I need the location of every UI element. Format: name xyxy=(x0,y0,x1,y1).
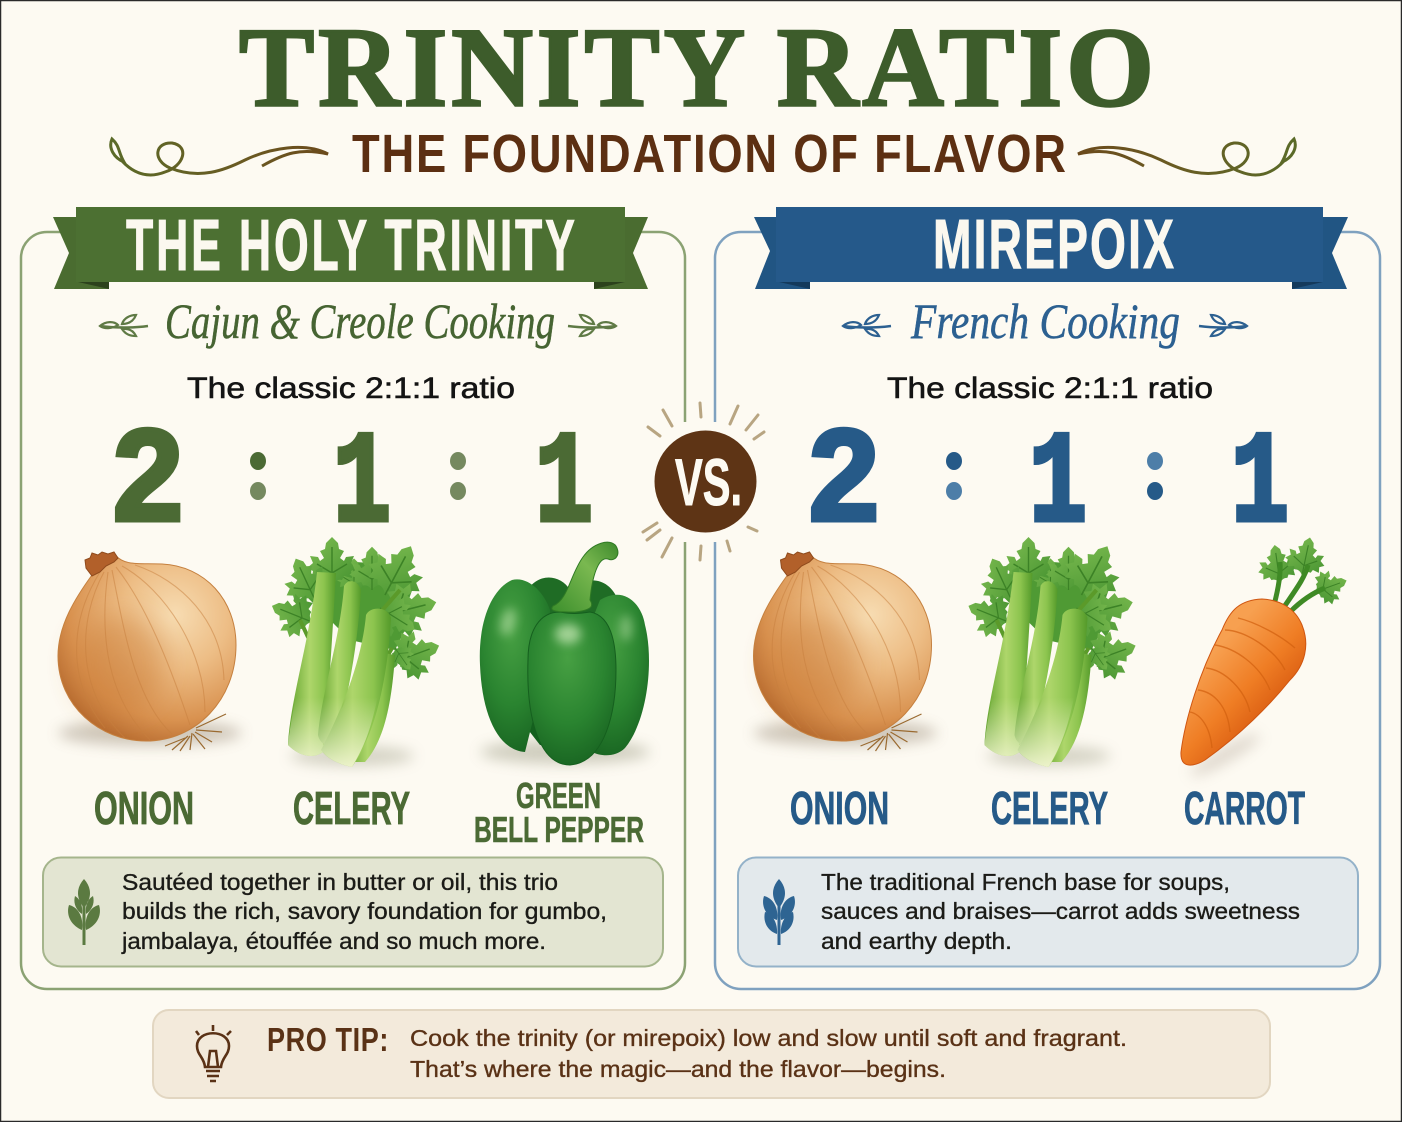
vs badge: VS. xyxy=(675,445,742,519)
ratio numbers: 1 xyxy=(1029,413,1087,560)
callout text: sauces and braises—carrot adds sweetness xyxy=(821,898,1300,924)
callout text xyxy=(821,869,1300,954)
title: TRINITY RATIO xyxy=(239,6,1154,130)
flourish: left xyxy=(111,139,328,175)
ratio caption: The classic 2:1:1 ratio xyxy=(187,372,515,405)
label: carrot: CARROT xyxy=(1184,782,1305,834)
icon: onion xyxy=(58,552,242,751)
sprig: right xyxy=(1199,315,1247,336)
icon: carrot xyxy=(1181,533,1353,781)
label: onion: ONION xyxy=(94,782,194,834)
callout text: and earthy depth. xyxy=(821,928,1012,954)
ratio numbers: 1 xyxy=(535,413,593,560)
ratio caption: The classic 2:1:1 ratio xyxy=(887,372,1213,405)
icon: light bulb xyxy=(196,1025,231,1081)
callout text: The traditional French base for soups, xyxy=(821,869,1230,895)
ratio numbers: 1 xyxy=(1231,413,1289,560)
region subtitle: french: French Cooking xyxy=(910,293,1180,349)
ratio numbers xyxy=(809,402,1289,560)
callout text: Sautéed together in butter or oil, this trio xyxy=(122,869,558,895)
ratio numbers: 2 xyxy=(113,402,183,548)
ribbon: holy trinity: THE HOLY TRINITY xyxy=(126,205,575,286)
callout: mirepoix xyxy=(738,858,1358,966)
pro tip bar xyxy=(153,1010,1270,1098)
panel: mirepoix xyxy=(715,204,1380,989)
ratio numbers: 2 xyxy=(809,402,879,548)
flourish: right xyxy=(1078,139,1295,175)
pro tip text: Cook the trinity (or mirepoix) low and slow until soft and fragrant. xyxy=(410,1025,1127,1051)
ribbon: mirepoix xyxy=(754,204,1348,289)
label: celery: CELERY xyxy=(293,782,410,834)
ratio numbers: 1 xyxy=(333,413,391,560)
pro tip text: That’s where the magic—and the flavor—begins. xyxy=(410,1056,946,1082)
callout text: jambalaya, étouffée and so much more. xyxy=(121,928,546,954)
icon: leaf sprig xyxy=(763,879,795,945)
sprig: right xyxy=(568,315,616,336)
sunburst rays xyxy=(643,403,764,560)
label: green bell pepper: GREEN xyxy=(516,775,601,816)
icon: onion xyxy=(754,552,938,751)
label: celery: CELERY xyxy=(991,782,1108,834)
icon: celery xyxy=(264,533,448,767)
callout: holy trinity xyxy=(43,858,663,966)
label: green bell pepper: BELL PEPPER xyxy=(474,809,644,850)
ribbon: mirepoix: MIREPOIX xyxy=(933,204,1174,283)
label: green bell pepper xyxy=(474,775,644,850)
sprig: left xyxy=(843,315,891,336)
ratio numbers xyxy=(113,402,593,560)
callout text xyxy=(121,869,607,954)
icon: leaf sprig xyxy=(68,879,100,945)
pro tip text xyxy=(410,1025,1127,1082)
panel: holy trinity xyxy=(21,205,685,989)
sprig: left xyxy=(100,315,148,336)
icon: green bell pepper xyxy=(480,542,650,765)
subtitle: THE FOUNDATION OF FLAVOR xyxy=(352,123,1066,184)
vs badge xyxy=(643,403,764,560)
callout text: builds the rich, savory foundation for gumbo, xyxy=(122,898,607,924)
pro tip label: PRO TIP: xyxy=(267,1023,388,1059)
icon: celery xyxy=(960,533,1144,767)
label: onion: ONION xyxy=(790,782,889,834)
region subtitle: cajun & creole: Cajun & Creole Cooking xyxy=(165,293,555,349)
